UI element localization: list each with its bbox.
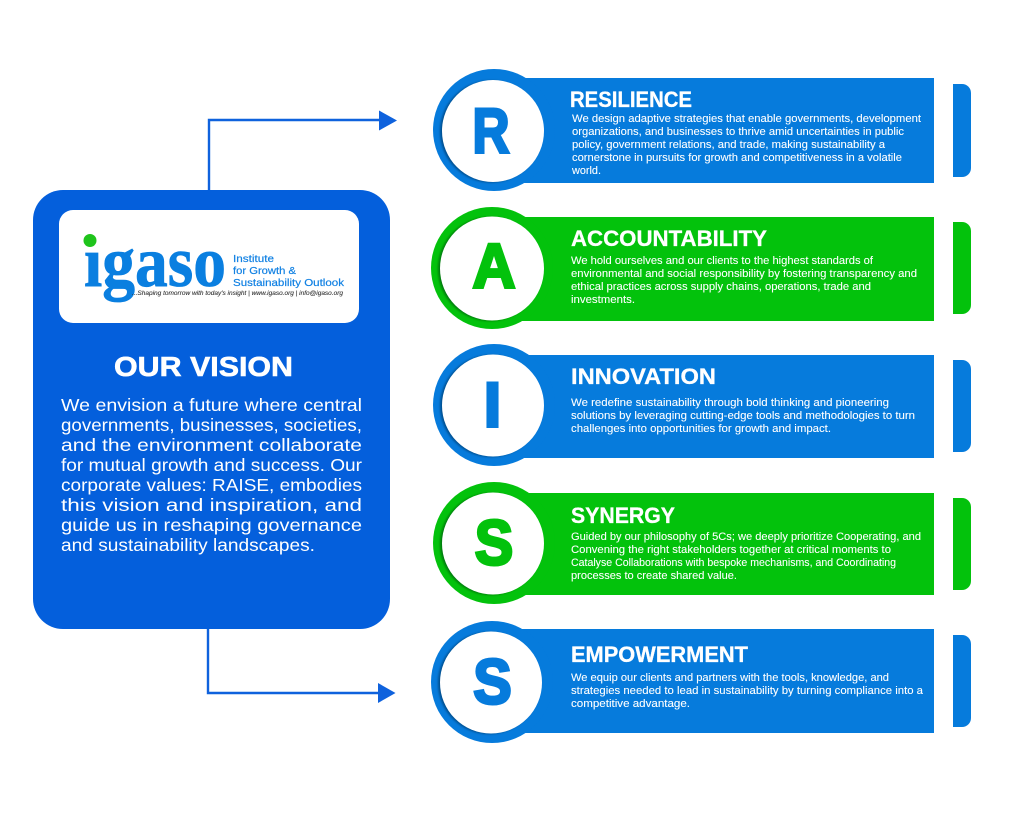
side tab — [953, 498, 971, 590]
description: processes to create shared value. — [571, 570, 737, 582]
description — [571, 113, 921, 177]
side tab — [953, 635, 971, 727]
heading: our vision: OUR VISION — [114, 351, 293, 382]
vision text: governments, businesses, societies, — [61, 415, 362, 435]
description — [571, 672, 923, 710]
description: ethical practices across supply chains, operations, trade and — [571, 281, 871, 293]
description: world. — [571, 165, 601, 177]
panel: synergy — [433, 482, 971, 604]
side tab — [953, 84, 971, 177]
panel: accountability — [431, 207, 971, 329]
panel: empowerment — [431, 621, 971, 743]
description: environmental and social responsibility by fostering transparency and — [571, 268, 917, 280]
arrow: top connector to Resilience — [209, 110, 397, 190]
icon: letter I circle: I — [484, 370, 501, 440]
description: investments. — [571, 294, 635, 306]
description — [571, 255, 917, 306]
logo green dot — [84, 234, 96, 247]
logo name: for Growth & — [233, 265, 296, 277]
description: challenges into opportunities for growth and impact. — [571, 423, 831, 435]
vision text: guide us in reshaping governance — [61, 515, 362, 535]
description: cornerstone in pursuits for growth and competitiveness in a volatile — [572, 152, 902, 164]
side tab — [953, 360, 971, 452]
icon: letter R circle — [433, 69, 555, 191]
description: policy, government relations, and trade, making sustainability a — [572, 139, 885, 151]
icon: letter A circle — [431, 207, 553, 329]
description: We equip our clients and partners with the tools, knowledge, and — [571, 672, 889, 684]
logo tagline: ...Shaping tomorrow with today's insight | www.igaso.org | info@igaso.org — [132, 291, 344, 297]
description — [571, 397, 915, 435]
arrow: bottom connector to Empowerment — [208, 629, 396, 703]
side tab — [953, 222, 971, 314]
vision text — [61, 395, 362, 555]
heading: RESILIENCE — [570, 87, 692, 112]
heading: INNOVATION — [571, 364, 716, 389]
icon: letter S circle — [433, 482, 555, 604]
vision text: We envision a future where central — [61, 395, 362, 415]
heading: EMPOWERMENT — [571, 642, 749, 667]
description: We design adaptive strategies that enable governments, development — [572, 113, 921, 125]
heading: SYNERGY — [571, 503, 675, 528]
icon: letter I circle — [433, 344, 555, 466]
icon: letter A circle: A — [472, 232, 516, 302]
description: organizations, and businesses to thrive amid uncertainties in public — [572, 126, 905, 138]
icon: letter S circle — [431, 621, 553, 743]
panel: resilience — [433, 69, 971, 191]
panel: our vision — [33, 190, 390, 629]
panel: innovation — [433, 344, 971, 466]
logo name: Sustainability Outlook — [233, 277, 345, 289]
description: Guided by our philosophy of 5Cs; we deeply prioritize Cooperating, and — [571, 531, 921, 543]
icon: letter S circle: S — [473, 648, 512, 718]
vision text: corporate values: RAISE, embodies — [61, 475, 362, 495]
description: competitive advantage. — [571, 698, 690, 710]
description: solutions by leveraging cutting-edge tools and methodologies to turn — [571, 410, 915, 422]
logo name — [233, 253, 345, 289]
vision text: this vision and inspiration, and — [61, 495, 362, 515]
description: strategies needed to lead in sustainability by turning compliance into a — [571, 685, 923, 697]
description: We redefine sustainability through bold thinking and pioneering — [571, 397, 889, 409]
icon: letter R circle: R — [472, 96, 510, 166]
description: Convening the right stakeholders together at critical moments to — [571, 544, 891, 556]
description: Catalyse Collaborations with bespoke mechanisms, and Coordinating — [571, 557, 896, 569]
vision text: for mutual growth and success. Our — [61, 455, 362, 475]
heading: ACCOUNTABILITY — [571, 226, 767, 251]
description: We hold ourselves and our clients to the highest standards of — [571, 255, 873, 267]
icon: letter S circle: S — [475, 508, 513, 578]
logo dot mask — [82, 230, 100, 248]
logo card — [59, 210, 359, 323]
logo name: Institute — [233, 253, 274, 265]
description — [571, 531, 921, 582]
vision text: and the environment collaborate — [61, 435, 362, 455]
vision text: and sustainability landscapes. — [61, 535, 315, 555]
logo wordmark: igaso — [84, 222, 226, 302]
